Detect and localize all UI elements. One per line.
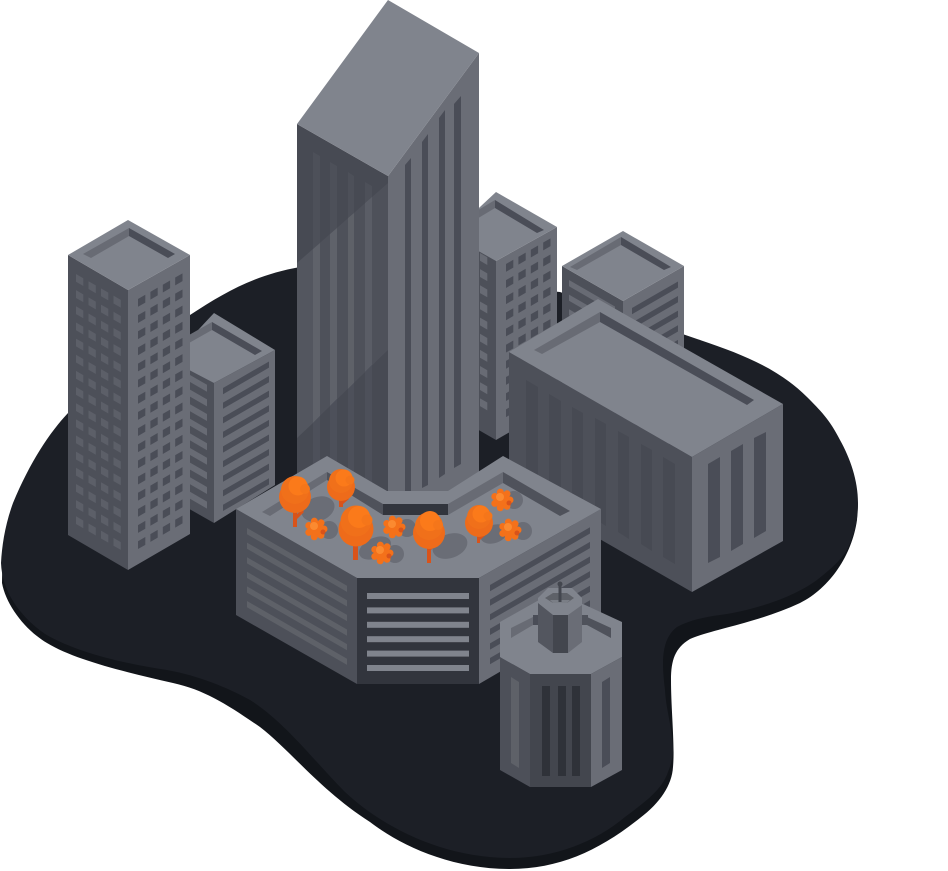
podium building with roof garden: [236, 456, 601, 684]
large right building: [509, 299, 783, 592]
bush 1: [308, 521, 326, 537]
octagon front face: [530, 674, 591, 787]
octagon left face: [500, 657, 530, 787]
small octagonal building: [500, 582, 622, 787]
left mid striped building: [170, 313, 275, 523]
tree 4: [413, 511, 445, 563]
back right striped building: [562, 231, 684, 470]
podium right face: [479, 509, 601, 684]
octagon roof: [500, 600, 622, 674]
roof: [509, 299, 783, 457]
tree 2: [327, 469, 355, 507]
island surface: [1, 267, 858, 858]
left face: [297, 124, 388, 530]
bush 4: [494, 492, 512, 508]
right face: [388, 53, 479, 530]
tree 5: [465, 505, 493, 543]
left window tower: [68, 220, 190, 570]
roof: [68, 220, 190, 290]
left face with windows: [68, 255, 128, 570]
main slanted skyscraper: [297, 0, 479, 530]
tree 3: [338, 506, 374, 560]
bush 3: [374, 545, 392, 561]
slanted roof: [297, 0, 479, 176]
tree shadows: [298, 491, 532, 564]
rooftop cap with antenna: [538, 582, 582, 653]
island shadow: [2, 267, 858, 869]
bush 5: [502, 522, 520, 538]
podium roof: [236, 456, 601, 578]
island base: [1, 267, 858, 869]
right face with windows: [128, 255, 190, 570]
left face with bays: [509, 352, 692, 592]
bush 2: [386, 519, 404, 535]
octagon right face: [591, 657, 622, 787]
podium left face: [236, 509, 357, 684]
tree 1: [279, 476, 311, 527]
right face with bays: [692, 404, 783, 592]
podium front face: [357, 578, 479, 684]
back right window tower: [450, 186, 557, 440]
